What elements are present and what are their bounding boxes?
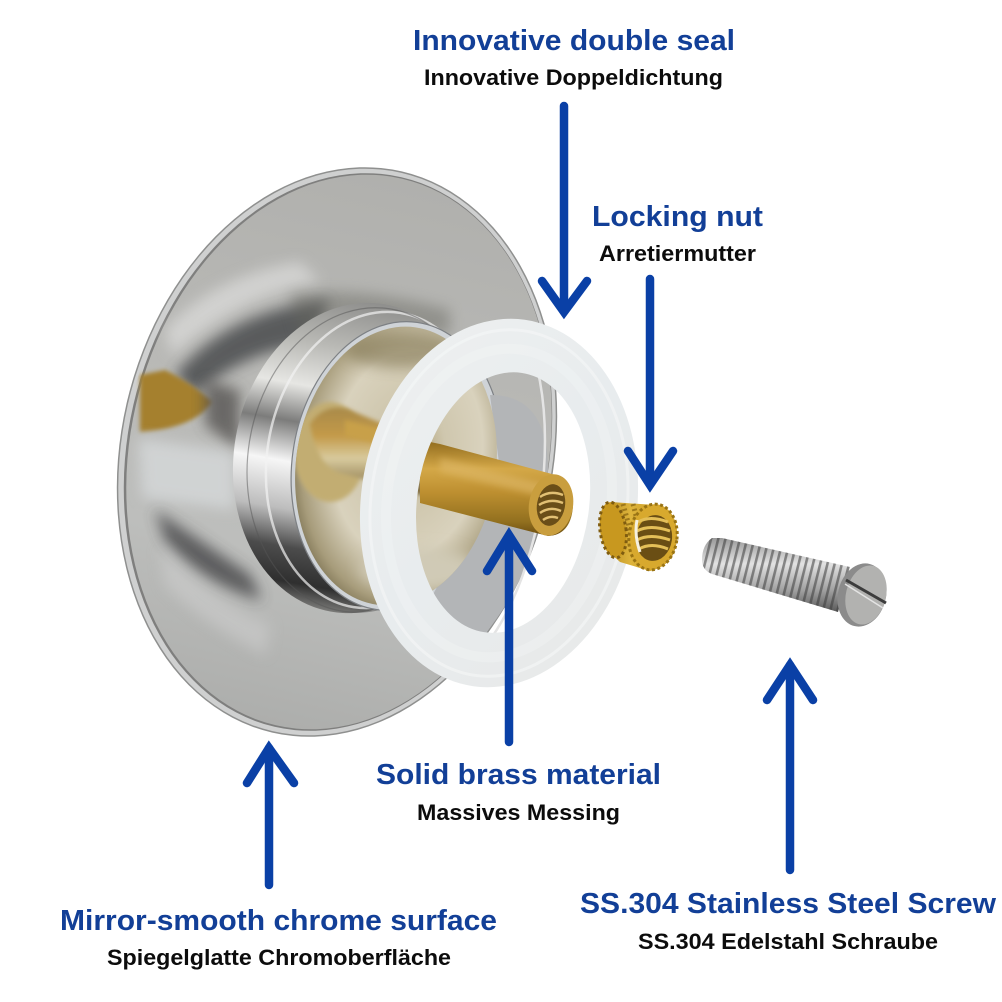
label: innovative double seal: Innovative Doppeldichtung xyxy=(424,65,723,90)
label: solid brass material: Solid brass material xyxy=(376,759,661,791)
label: locking nut: Locking nut xyxy=(592,201,763,233)
chrome flange plate xyxy=(116,167,558,737)
stainless steel slotted screw xyxy=(702,538,893,632)
label: mirror-smooth chrome surface: Spiegelglatte Chromoberfläche xyxy=(107,945,451,970)
label: stainless steel screw: SS.304 Edelstahl Schraube xyxy=(638,929,938,954)
knurled brass locking nut xyxy=(596,500,681,573)
label: innovative double seal: Innovative double seal xyxy=(413,25,735,57)
label: innovative double seal xyxy=(413,25,735,90)
label: solid brass material xyxy=(376,759,661,825)
inner brass dish xyxy=(295,326,497,605)
arrow: brass stem xyxy=(487,535,532,742)
hub cylinder xyxy=(209,283,548,640)
arrow: locking nut xyxy=(628,279,673,485)
label: mirror-smooth chrome surface: Mirror-smooth chrome surface xyxy=(60,905,497,937)
brass threaded stem xyxy=(420,440,578,539)
white silicone seal ring xyxy=(337,301,661,705)
arrow: screw xyxy=(767,665,813,870)
label: stainless steel screw xyxy=(580,888,996,954)
label: locking nut: Arretiermutter xyxy=(599,241,756,266)
arrow: seal xyxy=(542,106,587,312)
label: stainless steel screw: SS.304 Stainless Steel Screw xyxy=(580,888,996,920)
label: solid brass material: Massives Messing xyxy=(417,800,620,825)
label: mirror-smooth chrome surface xyxy=(60,905,497,970)
product photo: drain valve parts xyxy=(116,167,887,779)
label: locking nut xyxy=(592,201,763,266)
arrow: chrome surface xyxy=(247,748,294,885)
